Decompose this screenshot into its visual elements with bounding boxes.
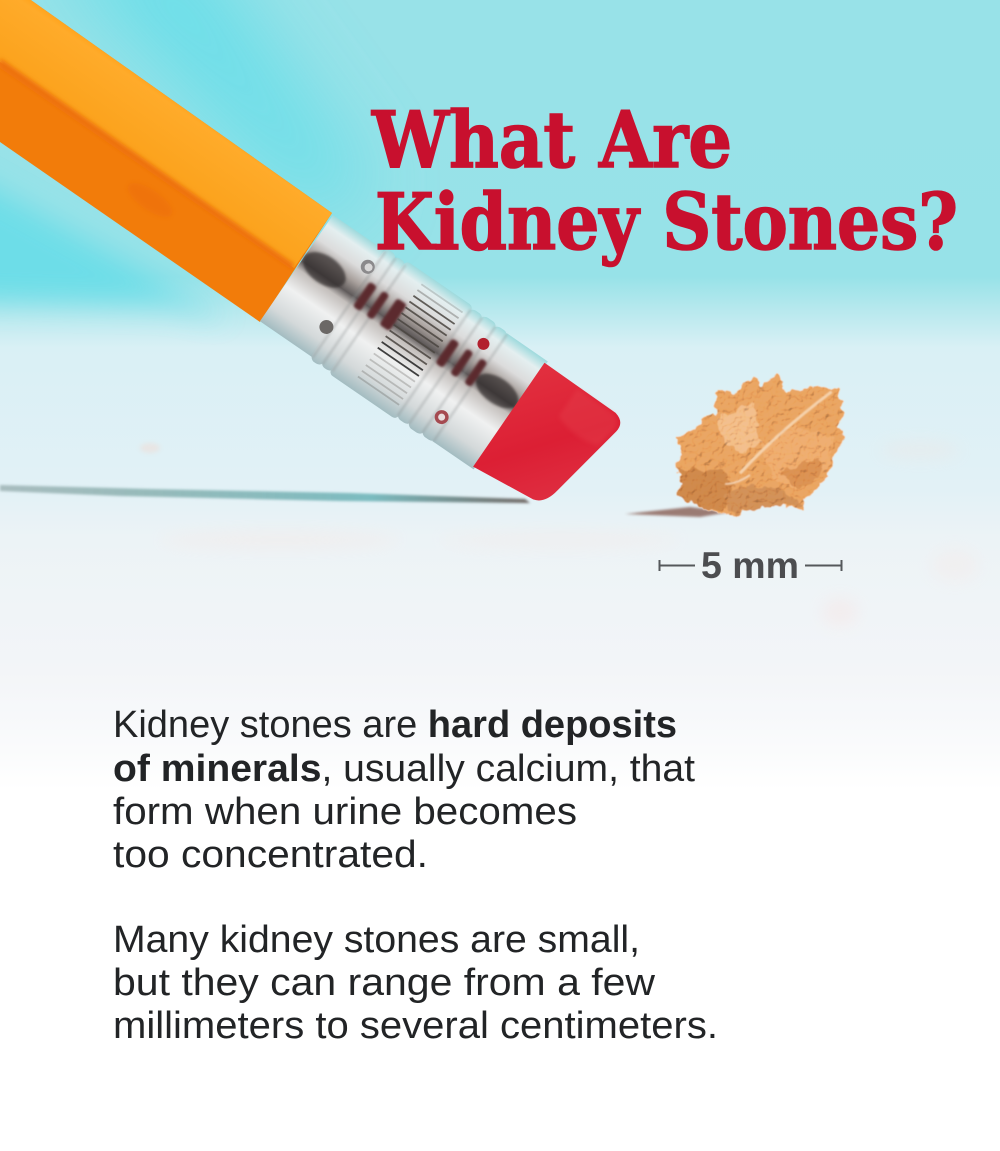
title: [371, 95, 958, 268]
text block: definition: form when urine becomes: [113, 791, 577, 833]
pencil illustration: [0, 0, 629, 526]
pencil body: [0, 0, 332, 322]
title: What Are: [371, 95, 732, 186]
size scale: 5 mm: 5 mm: [701, 545, 799, 586]
band shading: [313, 251, 507, 441]
dark reflections: [296, 241, 528, 415]
text block: size range: Many kidney stones are small,: [113, 919, 640, 961]
size scale: 5 mm: [659, 545, 842, 586]
text block: definition: too concentrated.: [113, 834, 428, 876]
text block: size range: but they can range from a few: [113, 962, 656, 1004]
dimples: [358, 257, 378, 277]
kidney stone photo: [625, 375, 845, 517]
eraser: [473, 363, 625, 522]
pencil shadow: [0, 485, 530, 503]
text block: size range: millimeters to several centimeters.: [113, 1005, 718, 1047]
text block: definition: Kidney stones are hard deposits: [113, 704, 677, 746]
metal ferrule: [258, 212, 550, 472]
text block: definition: [113, 704, 695, 876]
knurling: [358, 284, 463, 405]
text block: definition: of minerals, usually calcium, that: [113, 748, 695, 790]
text block: size range: [113, 919, 718, 1047]
